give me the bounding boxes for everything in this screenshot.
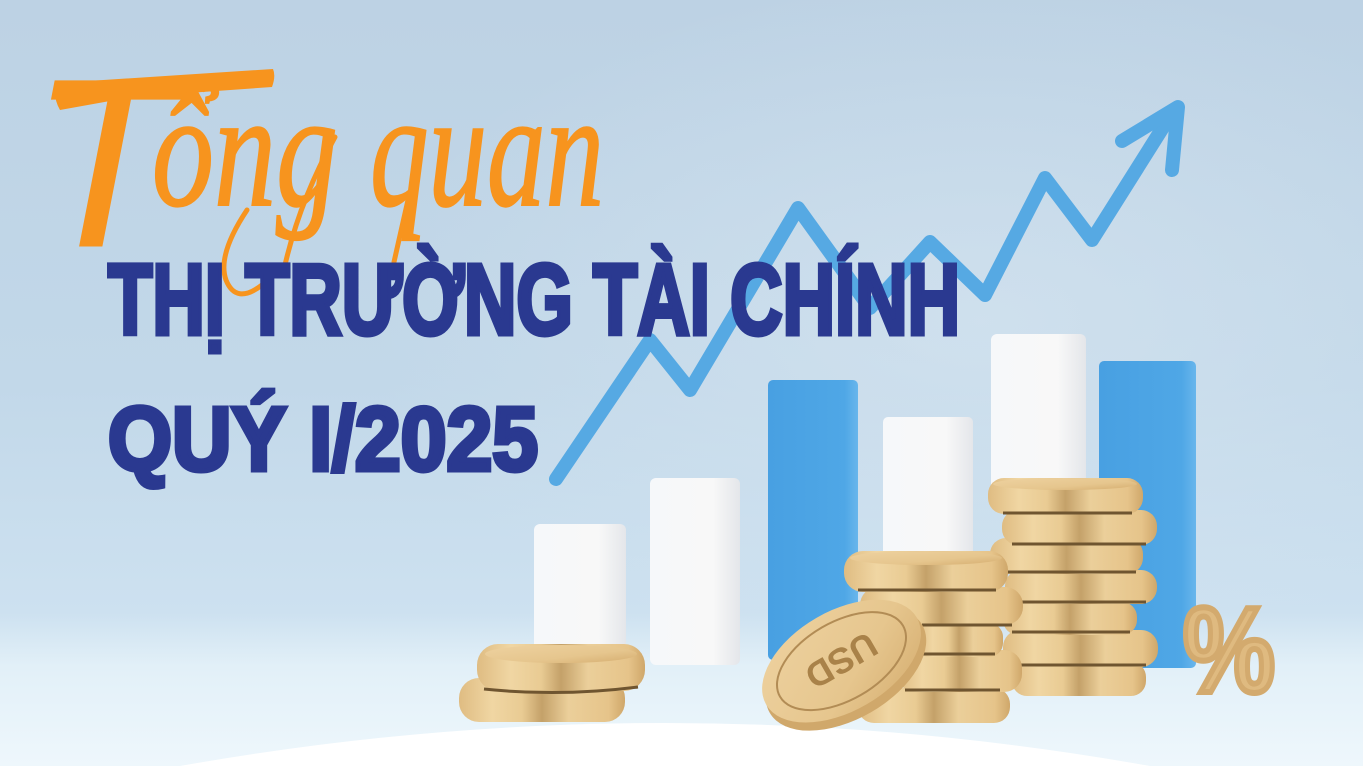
script capital: T [30, 29, 191, 297]
bar 1 white [534, 524, 626, 652]
brush bar [55, 69, 274, 110]
script letters: ong: ổng [152, 58, 338, 241]
coin stack: right [988, 478, 1158, 696]
arrow: rising trend line [556, 107, 1178, 479]
bar 6 blue [1099, 361, 1196, 668]
script letters: quan: quan [370, 58, 604, 241]
bar 5 white [991, 334, 1086, 504]
percent symbol: % [1183, 582, 1275, 718]
bar 4 white [883, 417, 973, 577]
white curved base [180, 723, 1150, 766]
title: script heading [30, 29, 604, 297]
q flourish [394, 200, 408, 262]
bar chart [534, 334, 1196, 668]
tilted coin [740, 574, 947, 756]
coin currency mark: USD [798, 624, 884, 697]
g flourish [224, 137, 335, 294]
coin stack: centre [844, 551, 1023, 723]
headline line 2: QUÝ I/2025 [108, 389, 538, 490]
coin stack: left [459, 644, 645, 722]
bar 3 blue [768, 380, 858, 660]
bar 2 white [650, 478, 740, 665]
headline line 1: THỊ TRƯỜNG TÀI CHÍNH [108, 244, 960, 356]
